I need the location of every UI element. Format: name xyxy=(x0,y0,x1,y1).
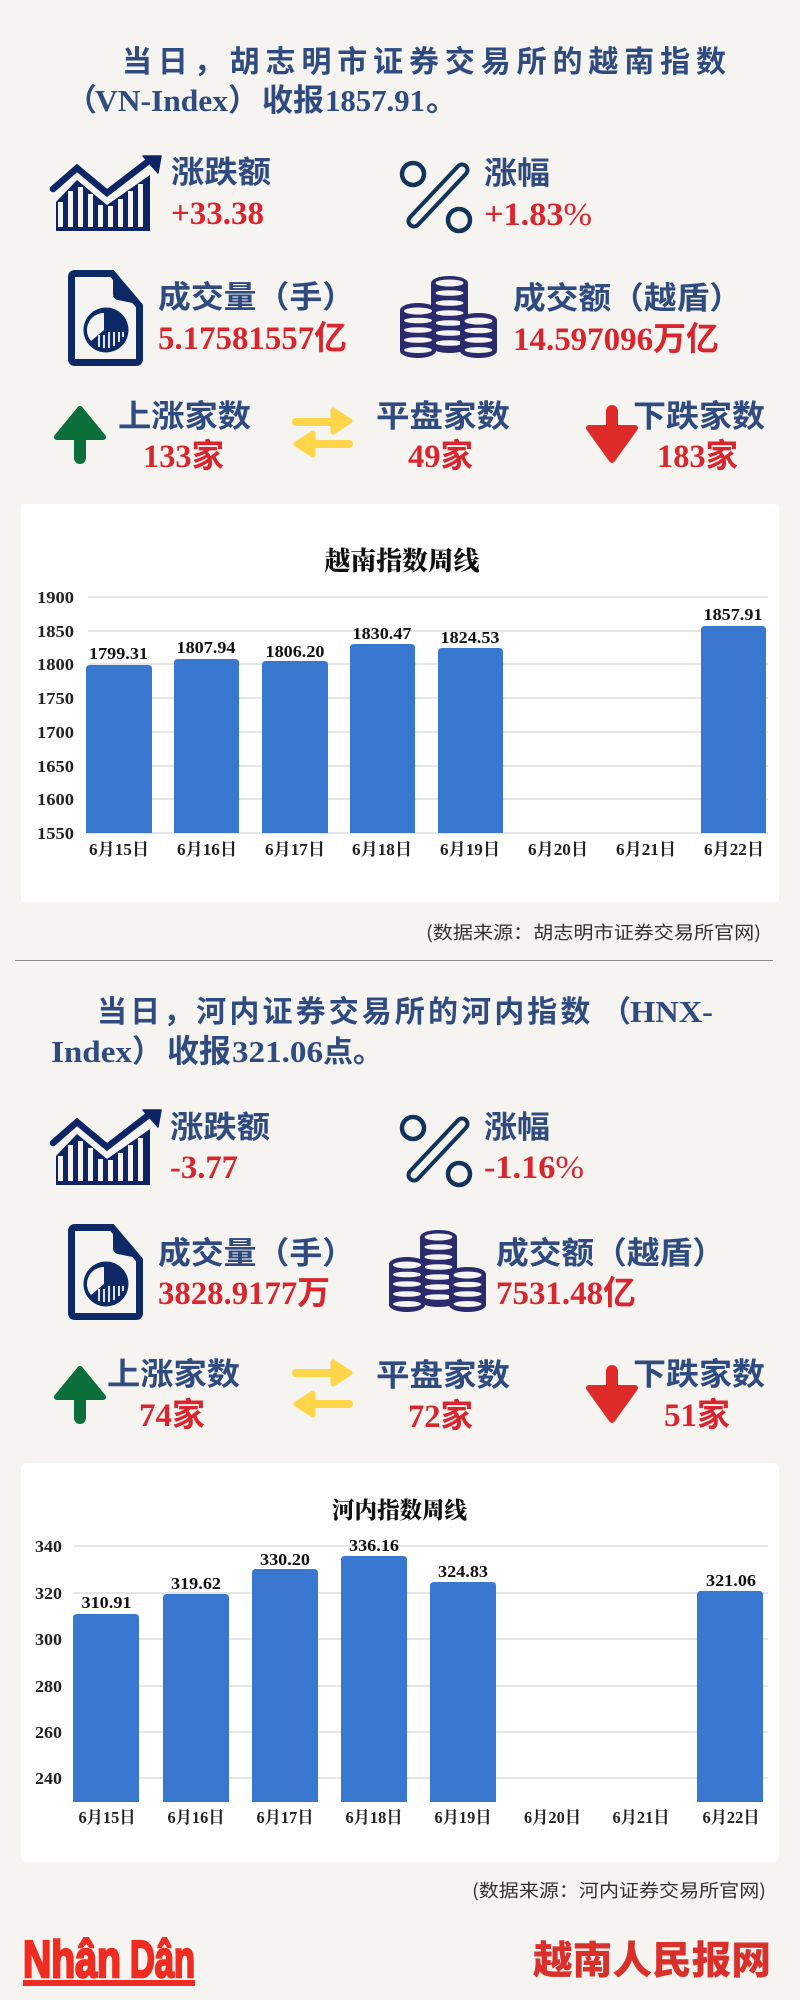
x axis labels: 6月20日 xyxy=(528,840,588,859)
value: turnover: 7531.48亿 xyxy=(496,1275,636,1312)
value: advancers: 74家 xyxy=(139,1397,205,1434)
icon: document with pie chart xyxy=(72,272,142,362)
value labels: 1799.31 xyxy=(89,644,148,663)
label: change percent: 涨幅 xyxy=(484,148,550,193)
title: HNX-Index headline: 收报 xyxy=(167,1033,231,1069)
icon: down arrow xyxy=(589,1371,635,1420)
value: unchanged: 49家 xyxy=(408,438,473,475)
icon: percent xyxy=(402,163,470,231)
title: HNX-Index headline: HNX- xyxy=(630,994,713,1029)
x axis labels: 6月21日 xyxy=(612,1808,670,1827)
title: VN-Index headline: 。 xyxy=(426,83,457,118)
icon: down arrow xyxy=(589,411,635,460)
x axis labels: 6月16日 xyxy=(177,840,237,859)
y axis labels: 240 xyxy=(35,1769,62,1788)
title: VN-Index headline xyxy=(66,46,726,118)
icon: percent xyxy=(402,1117,470,1185)
source note: (数据来源：河内证券交易所官网) xyxy=(472,1877,766,1903)
panel: HNX-Index weekly chart xyxy=(21,1463,779,1862)
title: VN-Index headline: 1857.91 xyxy=(325,83,425,118)
chart title: 河内指数周线 xyxy=(332,1498,467,1523)
x axis labels: 6月16日 xyxy=(168,1808,224,1827)
label: unchanged: 平盘家数 xyxy=(376,1350,510,1395)
y axis labels: 1550 xyxy=(37,824,74,843)
value: unchanged: 72家 xyxy=(408,1398,473,1435)
y axis labels: 320 xyxy=(35,1584,62,1603)
title: VN-Index headline: ） xyxy=(228,83,259,118)
title: VN-Index headline: 当日，胡志明市证券交易所的越南指数 xyxy=(122,46,726,79)
title: HNX-Index headline: 点。 xyxy=(323,1036,383,1069)
grid lines xyxy=(88,597,768,833)
value: advancers: 133家 xyxy=(143,438,224,475)
value: decliners: 51家 xyxy=(664,1397,730,1434)
icon: rising chart xyxy=(53,156,161,231)
title: HNX-Index headline: （ xyxy=(601,996,631,1029)
icon: coin stacks xyxy=(389,1230,486,1312)
section: HNX-Index xyxy=(21,994,779,1903)
y axis labels: 1750 xyxy=(37,689,74,708)
source note: (数据来源：胡志明市证券交易所官网) xyxy=(426,919,761,945)
title: VN-Index headline: （ xyxy=(66,83,97,118)
value: volume: 3828.9177万 xyxy=(158,1276,330,1312)
label: unchanged: 平盘家数 xyxy=(376,391,510,436)
footer brand: Vietnam People's Daily: 越南人民报网 xyxy=(533,1930,771,1986)
label: decliners: 下跌家数 xyxy=(633,391,765,436)
x axis labels: 6月18日 xyxy=(346,1808,402,1827)
label: change amount: 涨跌额 xyxy=(171,147,271,192)
x axis labels: 6月20日 xyxy=(524,1808,581,1827)
value labels xyxy=(82,1536,756,1612)
x axis labels xyxy=(89,840,764,859)
value labels: 1857.91 xyxy=(704,605,762,624)
value: volume: 5.17581557亿 xyxy=(158,320,347,357)
icon: exchange arrows xyxy=(296,1362,350,1415)
value: turnover: 14.597096万亿 xyxy=(513,321,719,358)
title: HNX-Index headline: 当日，河内证券交易所的河内指数 xyxy=(97,996,594,1029)
title: HNX-Index headline: 321.06 xyxy=(232,1034,323,1069)
icon: exchange arrows xyxy=(296,410,350,455)
value labels: 1830.47 xyxy=(352,624,412,643)
value labels: 336.16 xyxy=(349,1536,399,1555)
icon: document with pie chart xyxy=(72,1226,142,1316)
value labels: 310.91 xyxy=(82,1593,132,1612)
title: VN-Index headline: 收报 xyxy=(262,83,324,118)
label: change percent: 涨幅 xyxy=(484,1102,550,1147)
value labels: 1824.53 xyxy=(440,628,500,647)
y axis labels: 1650 xyxy=(37,757,74,776)
x axis labels: 6月22日 xyxy=(704,840,764,859)
label: advancers: 上涨家数 xyxy=(118,391,251,436)
title: HNX-Index headline: Index xyxy=(51,1034,133,1069)
y axis labels: 1850 xyxy=(37,622,74,641)
value labels xyxy=(89,605,762,663)
panel: VN-Index weekly chart xyxy=(21,504,779,902)
value labels: 1807.94 xyxy=(176,638,236,657)
y axis labels: 1800 xyxy=(37,655,74,674)
icon: coin stacks xyxy=(400,276,497,358)
y axis labels xyxy=(35,1537,62,1788)
y axis labels xyxy=(37,588,74,843)
x axis labels: 6月22日 xyxy=(702,1808,760,1827)
x axis labels: 6月21日 xyxy=(616,840,676,859)
value labels: 324.83 xyxy=(438,1562,488,1581)
label: decliners: 下跌家数 xyxy=(633,1349,765,1394)
value: change amount: -3.77 xyxy=(170,1150,238,1186)
label: volume: 成交量（手） xyxy=(158,1228,355,1273)
y axis labels: 1700 xyxy=(37,723,74,742)
label: volume: 成交量（手） xyxy=(158,272,355,317)
value: change amount: +33.38 xyxy=(171,196,264,232)
title: VN-Index headline: VN-Index xyxy=(95,83,229,118)
value: decliners: 183家 xyxy=(657,438,738,475)
label: advancers: 上涨家数 xyxy=(107,1349,240,1394)
y axis labels: 300 xyxy=(35,1630,62,1649)
x axis labels xyxy=(78,1808,760,1827)
y axis labels: 260 xyxy=(35,1723,62,1742)
value labels: 330.20 xyxy=(260,1550,310,1569)
x axis labels: 6月19日 xyxy=(434,1808,492,1827)
value: change percent: +1.83% xyxy=(484,197,592,233)
value labels: 1806.20 xyxy=(266,642,324,661)
value labels: 319.62 xyxy=(171,1574,221,1593)
x axis labels: 6月15日 xyxy=(78,1808,136,1827)
x axis labels: 6月15日 xyxy=(89,840,149,859)
logo: Nhan Dan: Dân xyxy=(130,1931,195,1989)
chart title: 越南指数周线 xyxy=(324,546,480,576)
value labels: 321.06 xyxy=(706,1571,756,1590)
label: change amount: 涨跌额 xyxy=(170,1102,270,1147)
bars xyxy=(86,626,766,833)
title: HNX-Index headline: ） xyxy=(132,1034,163,1069)
x axis labels: 6月17日 xyxy=(265,840,325,859)
value: change percent: -1.16% xyxy=(484,1150,584,1186)
x axis labels: 6月18日 xyxy=(352,840,412,859)
bars xyxy=(73,1556,763,1802)
icon: up arrow xyxy=(57,409,103,458)
label: turnover: 成交额（越盾） xyxy=(496,1228,725,1273)
y axis labels: 1600 xyxy=(37,790,74,809)
x axis labels: 6月19日 xyxy=(440,840,500,859)
x axis labels: 6月17日 xyxy=(256,1808,314,1827)
icon: up arrow xyxy=(57,1369,103,1418)
icon: rising chart xyxy=(53,1110,161,1185)
y axis labels: 340 xyxy=(35,1537,62,1556)
grid lines xyxy=(74,1546,768,1778)
logo: Nhan Dan: Nhân xyxy=(23,1931,121,1989)
y axis labels: 1900 xyxy=(37,588,74,607)
y axis labels: 280 xyxy=(35,1677,62,1696)
label: turnover: 成交额（越盾） xyxy=(513,273,742,318)
title: HNX-Index headline xyxy=(51,994,713,1069)
section: VN-Index xyxy=(21,46,779,945)
